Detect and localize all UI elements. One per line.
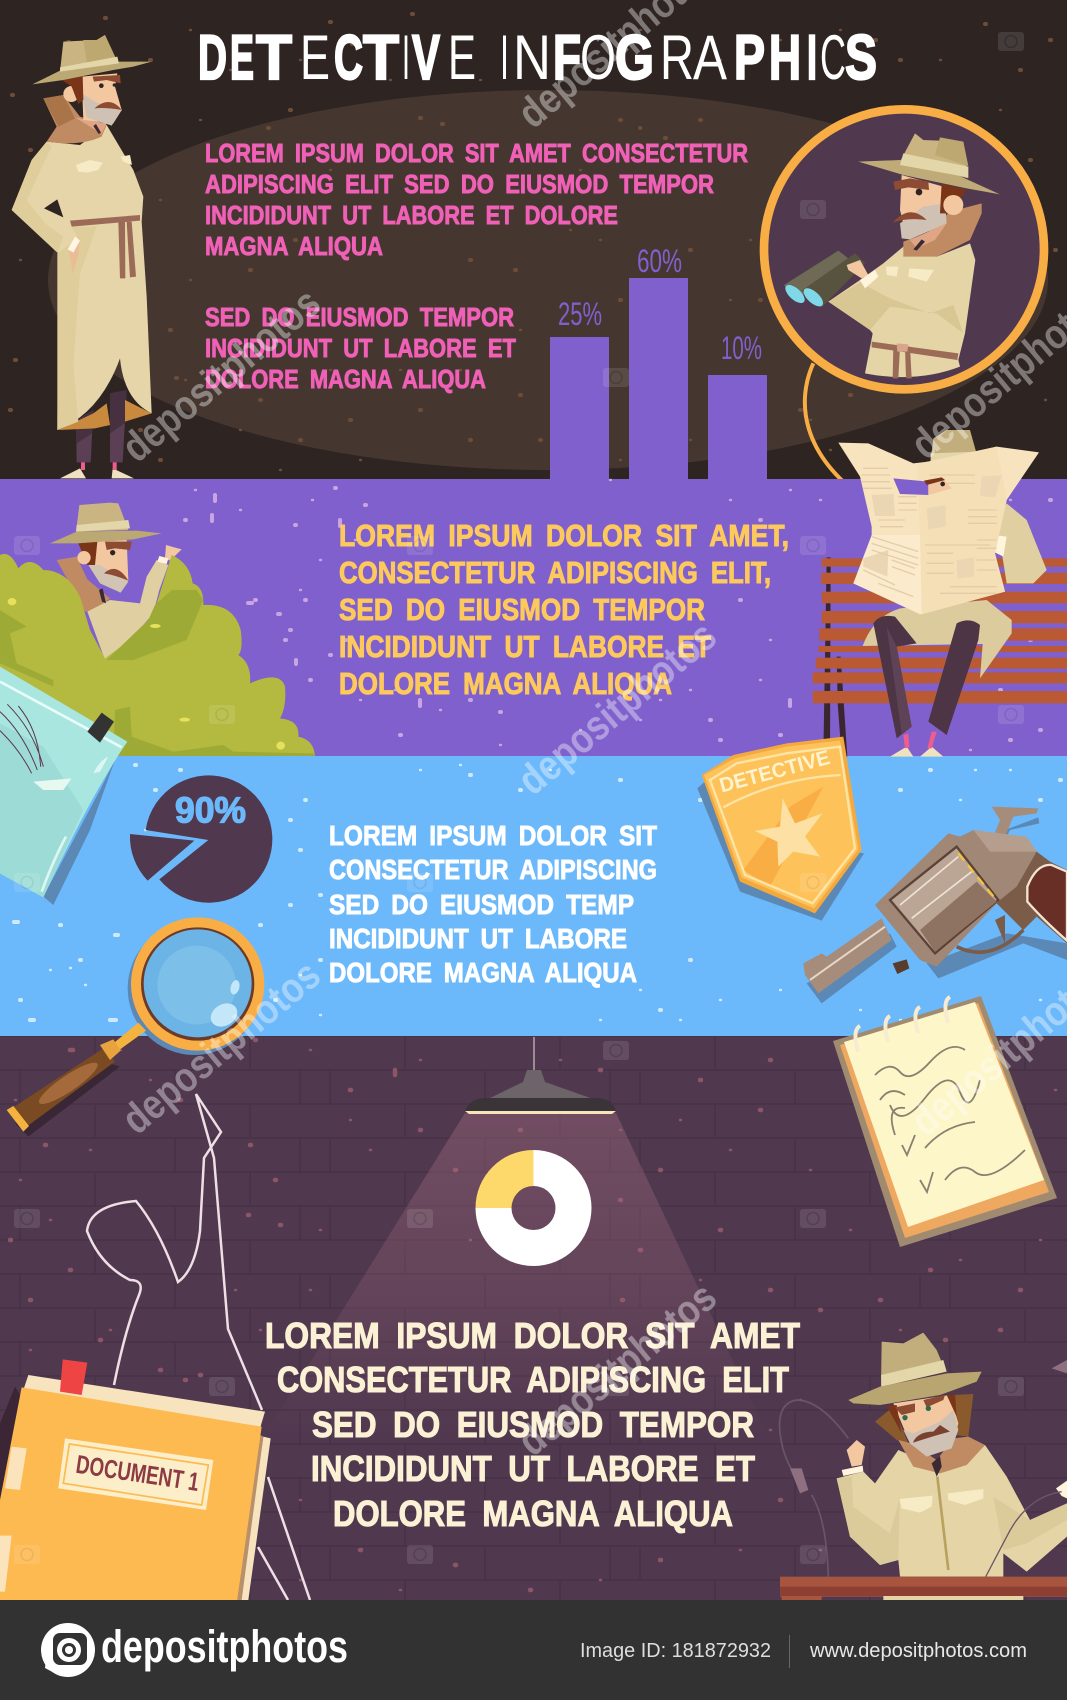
folder: document 1 bbox=[0, 1359, 271, 1600]
band: brick wall section bbox=[0, 1036, 1067, 1600]
pie chart with 90% bbox=[130, 775, 272, 903]
text block: cream centered paragraph: LOREM IPSUM DOLOR SIT AMET bbox=[265, 1315, 800, 1356]
text block: yellow paragraph: DOLORE MAGNA ALIQUA bbox=[339, 666, 672, 701]
title: R bbox=[660, 23, 694, 93]
text block: white paragraph: INCIDIDUNT UT LABORE bbox=[329, 923, 627, 954]
detective badge bbox=[697, 737, 864, 921]
text block: white paragraph: SED DO EIUSMOD TEMP bbox=[329, 889, 634, 920]
title: H bbox=[769, 23, 801, 93]
depositphotos watermarks: depositphotos bbox=[113, 951, 329, 1143]
pie chart with 90%: 90% bbox=[175, 790, 246, 831]
title: A bbox=[693, 23, 727, 93]
band: dark top section bbox=[0, 0, 1067, 480]
bush bbox=[0, 554, 315, 758]
title: E bbox=[448, 23, 476, 93]
newspaper bbox=[838, 443, 1039, 614]
revolver bbox=[803, 807, 1067, 1003]
title: E bbox=[230, 23, 254, 93]
band: footer bbox=[0, 1600, 1067, 1700]
bar chart: 60% bbox=[637, 243, 682, 279]
text block: cream centered paragraph bbox=[265, 1315, 800, 1534]
title: O bbox=[580, 23, 616, 93]
desk bbox=[780, 1577, 1067, 1600]
text block: pink paragraph one: INCIDIDUNT UT LABORE ET DOLORE bbox=[205, 200, 618, 230]
title: I bbox=[402, 23, 410, 93]
depositphotos watermarks: depositphotos bbox=[509, 1273, 725, 1465]
magnifying glass bbox=[7, 917, 264, 1137]
text block: pink paragraph one: LOREM IPSUM DOLOR SIT AMET CONSECTETUR bbox=[205, 138, 748, 168]
detective hiding bbox=[50, 503, 182, 660]
detective badge: DETECTIVE bbox=[717, 746, 832, 797]
title: E bbox=[300, 23, 330, 93]
chalk body outline bbox=[87, 1094, 310, 1600]
website url: www.depositphotos.com bbox=[809, 1640, 1027, 1662]
shoes and socks bbox=[890, 747, 913, 757]
title: T bbox=[256, 23, 292, 93]
depositphotos watermarks: depositphotos bbox=[509, 612, 725, 804]
band: purple section bbox=[0, 479, 1067, 757]
footer logo wordmark: depositphotos bbox=[101, 1621, 348, 1672]
speckles: brick section bbox=[10, 1040, 1056, 1590]
text block: pink paragraph two: DOLORE MAGNA ALIQUA bbox=[205, 364, 486, 394]
lens tail bbox=[805, 363, 865, 499]
title: F bbox=[553, 23, 581, 93]
footer logo icon bbox=[41, 1623, 95, 1677]
bar chart bbox=[550, 243, 767, 480]
depositphotos watermarks bbox=[113, 0, 1067, 1465]
newspaper detective on bench bbox=[813, 430, 1067, 757]
text block: cream centered paragraph: DOLORE MAGNA ALIQUA bbox=[333, 1493, 733, 1534]
title: C bbox=[820, 23, 846, 93]
hat bbox=[931, 430, 978, 461]
trench coat bbox=[997, 503, 1047, 583]
text block: white paragraph: CONSECTETUR ADIPISCING bbox=[329, 854, 657, 885]
detective standing in trench coat bbox=[12, 35, 152, 478]
title: N bbox=[513, 23, 551, 93]
hole and eye bbox=[893, 478, 928, 495]
text block: white paragraph: DOLORE MAGNA ALIQUA bbox=[329, 957, 637, 988]
detective with binoculars bbox=[782, 133, 1000, 378]
text block: white paragraph bbox=[329, 820, 657, 988]
lamp light cone bbox=[262, 1113, 770, 1440]
depositphotos watermarks: depositphotos bbox=[113, 279, 329, 471]
speckles: purple section bbox=[185, 480, 1061, 750]
text block: pink paragraph two bbox=[205, 302, 516, 394]
title: S bbox=[845, 23, 877, 93]
notepad bbox=[833, 996, 1057, 1247]
evidence bag bbox=[0, 667, 127, 905]
text block: pink paragraph one: MAGNA ALIQUA bbox=[205, 231, 383, 261]
text block: yellow paragraph: SED DO EIUSMOD TEMPOR bbox=[339, 592, 705, 627]
text block: pink paragraph two: SED DO EIUSMOD TEMPOR bbox=[205, 302, 514, 332]
folder: document 1: DOCUMENT 1 bbox=[74, 1449, 201, 1497]
text block: pink paragraph one bbox=[205, 138, 748, 261]
text block: pink paragraph one: ADIPISCING ELIT SED DO EIUSMOD TEMPOR bbox=[205, 169, 714, 199]
text block: yellow paragraph: CONSECTETUR ADIPISCING ELIT, bbox=[339, 555, 771, 590]
band: blue section bbox=[0, 756, 1067, 1037]
footer divider bbox=[789, 1635, 790, 1668]
title: C bbox=[334, 23, 363, 93]
detective behind bush bbox=[0, 503, 315, 758]
text block: yellow paragraph: LOREM IPSUM DOLOR SIT AMET, bbox=[339, 518, 789, 553]
spotlight ellipse bbox=[48, 90, 1048, 470]
text block: white paragraph: LOREM IPSUM DOLOR SIT bbox=[329, 820, 657, 851]
ceiling lamp bbox=[465, 1037, 616, 1114]
bar chart: 25% bbox=[558, 296, 602, 332]
brick pattern bbox=[0, 1036, 1067, 1600]
speckles: blue section bbox=[14, 765, 1061, 1020]
text block: cream centered paragraph: INCIDIDUNT UT LABORE ET bbox=[311, 1448, 755, 1489]
lens circle bbox=[764, 109, 1044, 389]
text block: yellow paragraph: INCIDIDUNT UT LABORE ET bbox=[339, 629, 711, 664]
title: G bbox=[615, 23, 654, 93]
image id: Image ID: 181872932 bbox=[580, 1640, 771, 1662]
text block: yellow paragraph bbox=[339, 518, 789, 701]
title: I bbox=[807, 23, 817, 93]
detective on phone at desk bbox=[780, 1333, 1067, 1600]
bench bbox=[813, 557, 1067, 757]
text block: cream centered paragraph: CONSECTETUR ADIPISCING ELIT bbox=[277, 1359, 789, 1400]
title: P bbox=[734, 23, 765, 93]
title: V bbox=[412, 23, 440, 93]
speckles: dark section bbox=[10, 14, 1056, 470]
bar chart: 10% bbox=[721, 330, 762, 366]
title: T bbox=[363, 23, 399, 93]
title: I bbox=[500, 23, 509, 93]
text block: cream centered paragraph: SED DO EIUSMOD TEMPOR bbox=[312, 1404, 754, 1445]
donut chart bbox=[476, 1150, 592, 1266]
arm details bbox=[993, 535, 1007, 557]
text block: pink paragraph two: INCIDIDUNT UT LABORE ET bbox=[205, 333, 516, 363]
legs bbox=[873, 616, 917, 738]
title: D bbox=[198, 23, 227, 93]
magnifier-lens portrait bbox=[764, 109, 1044, 499]
